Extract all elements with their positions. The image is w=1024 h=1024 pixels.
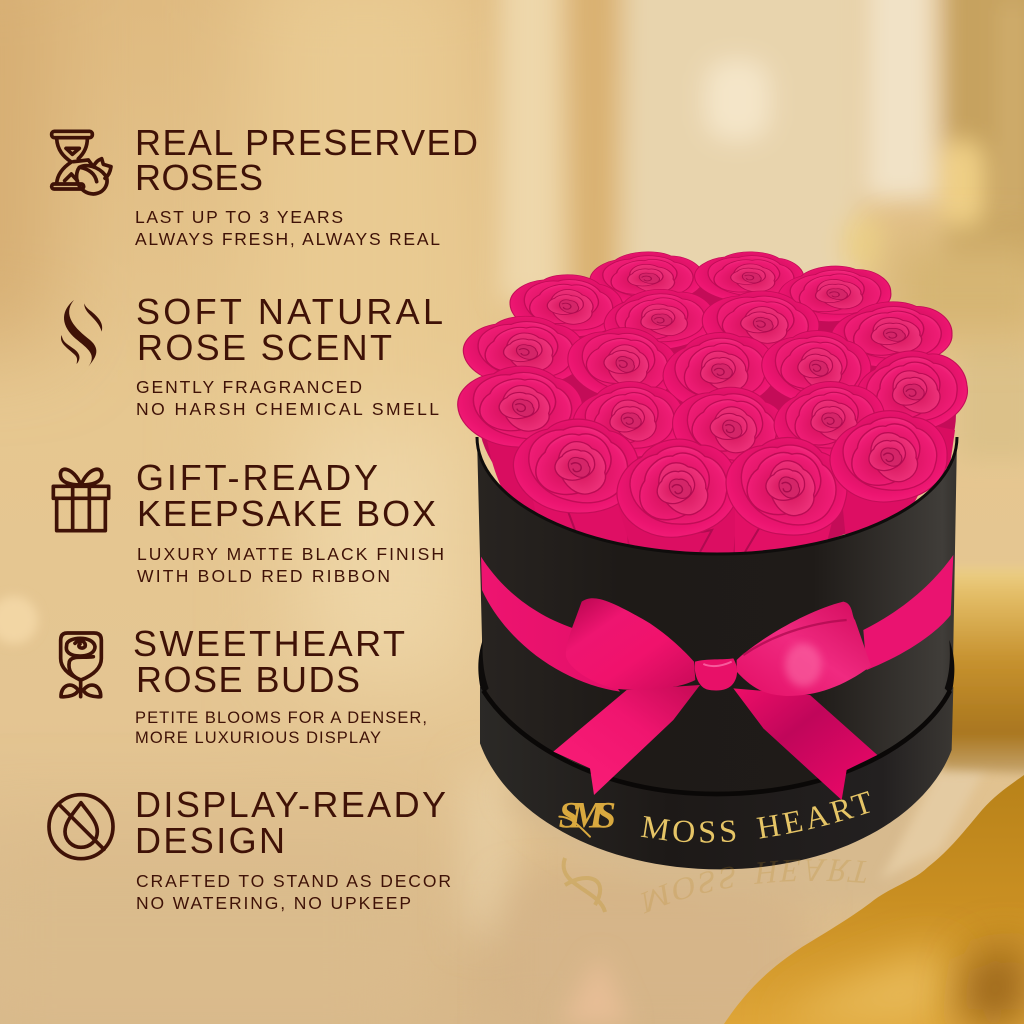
heading: ROSE BUDS — [136, 659, 360, 700]
heading: SWEETHEART — [133, 623, 405, 664]
lid band — [478, 640, 954, 869]
product: rose box — [457, 252, 968, 914]
description: MORE LUXURIOUS DISPLAY — [135, 729, 381, 747]
ribbon band and lid, drawn in detail coordinates — [478, 555, 954, 870]
icon: scent wisps — [61, 300, 102, 367]
description: LUXURY MATTE BLACK FINISH — [137, 544, 444, 564]
black box wall — [477, 437, 957, 830]
feature: real preserved roses — [52, 122, 478, 249]
bow left tail — [553, 685, 700, 795]
description: NO WATERING, NO UPKEEP — [136, 893, 411, 913]
feature: gift-ready keepsake box — [53, 457, 444, 586]
bow knot — [695, 658, 737, 690]
pink ribbon band — [481, 555, 953, 692]
gold monogram logo: SMS — [559, 795, 615, 836]
heading — [136, 291, 443, 368]
description: GENTLY FRAGRANCED — [136, 377, 362, 397]
brand name embossed: MOSS HEART — [640, 791, 870, 843]
reflective table surface — [470, 760, 990, 1024]
heading: SOFT NATURAL — [136, 291, 443, 332]
description — [137, 544, 444, 586]
description — [136, 377, 439, 419]
heading — [135, 122, 478, 198]
description: CRAFTED TO STAND AS DECOR — [136, 871, 451, 891]
reflected brand on table: MOSS HEART — [641, 859, 866, 914]
feature: soft natural rose scent — [61, 291, 443, 419]
heading: DESIGN — [135, 820, 285, 861]
heading: ROSES — [135, 157, 263, 198]
description — [135, 709, 427, 747]
heading — [136, 457, 436, 534]
gold silk cloth — [724, 568, 1024, 1024]
description: WITH BOLD RED RIBBON — [137, 566, 390, 586]
icon: gift box — [53, 469, 109, 531]
description — [136, 871, 451, 913]
heading: ROSE SCENT — [137, 327, 392, 368]
heading: KEEPSAKE BOX — [137, 493, 436, 534]
heading — [133, 623, 405, 700]
heading: DISPLAY-READY — [135, 784, 446, 825]
bow right loop — [737, 602, 871, 696]
icon: no water drop — [49, 795, 113, 859]
icon: hourglass with rose — [52, 131, 111, 194]
heading — [135, 784, 446, 861]
heading: GIFT-READY — [136, 457, 378, 498]
feature list — [49, 122, 478, 913]
heading: REAL PRESERVED — [135, 122, 478, 163]
feature: sweetheart rose buds — [61, 623, 427, 747]
description: ALWAYS FRESH, ALWAYS REAL — [135, 229, 440, 249]
feature: display-ready design — [49, 784, 451, 913]
icon: rose bud — [61, 633, 101, 697]
bow right tail — [733, 688, 877, 800]
bow left loop — [566, 598, 695, 690]
bouquet of preserved pink roses — [451, 247, 977, 556]
satin bow — [553, 598, 877, 800]
reflected logo on table — [564, 858, 605, 912]
description: LAST UP TO 3 YEARS — [135, 207, 343, 227]
description: NO HARSH CHEMICAL SMELL — [136, 399, 439, 419]
description: PETITE BLOOMS FOR A DENSER, — [135, 709, 427, 727]
description — [135, 207, 440, 249]
